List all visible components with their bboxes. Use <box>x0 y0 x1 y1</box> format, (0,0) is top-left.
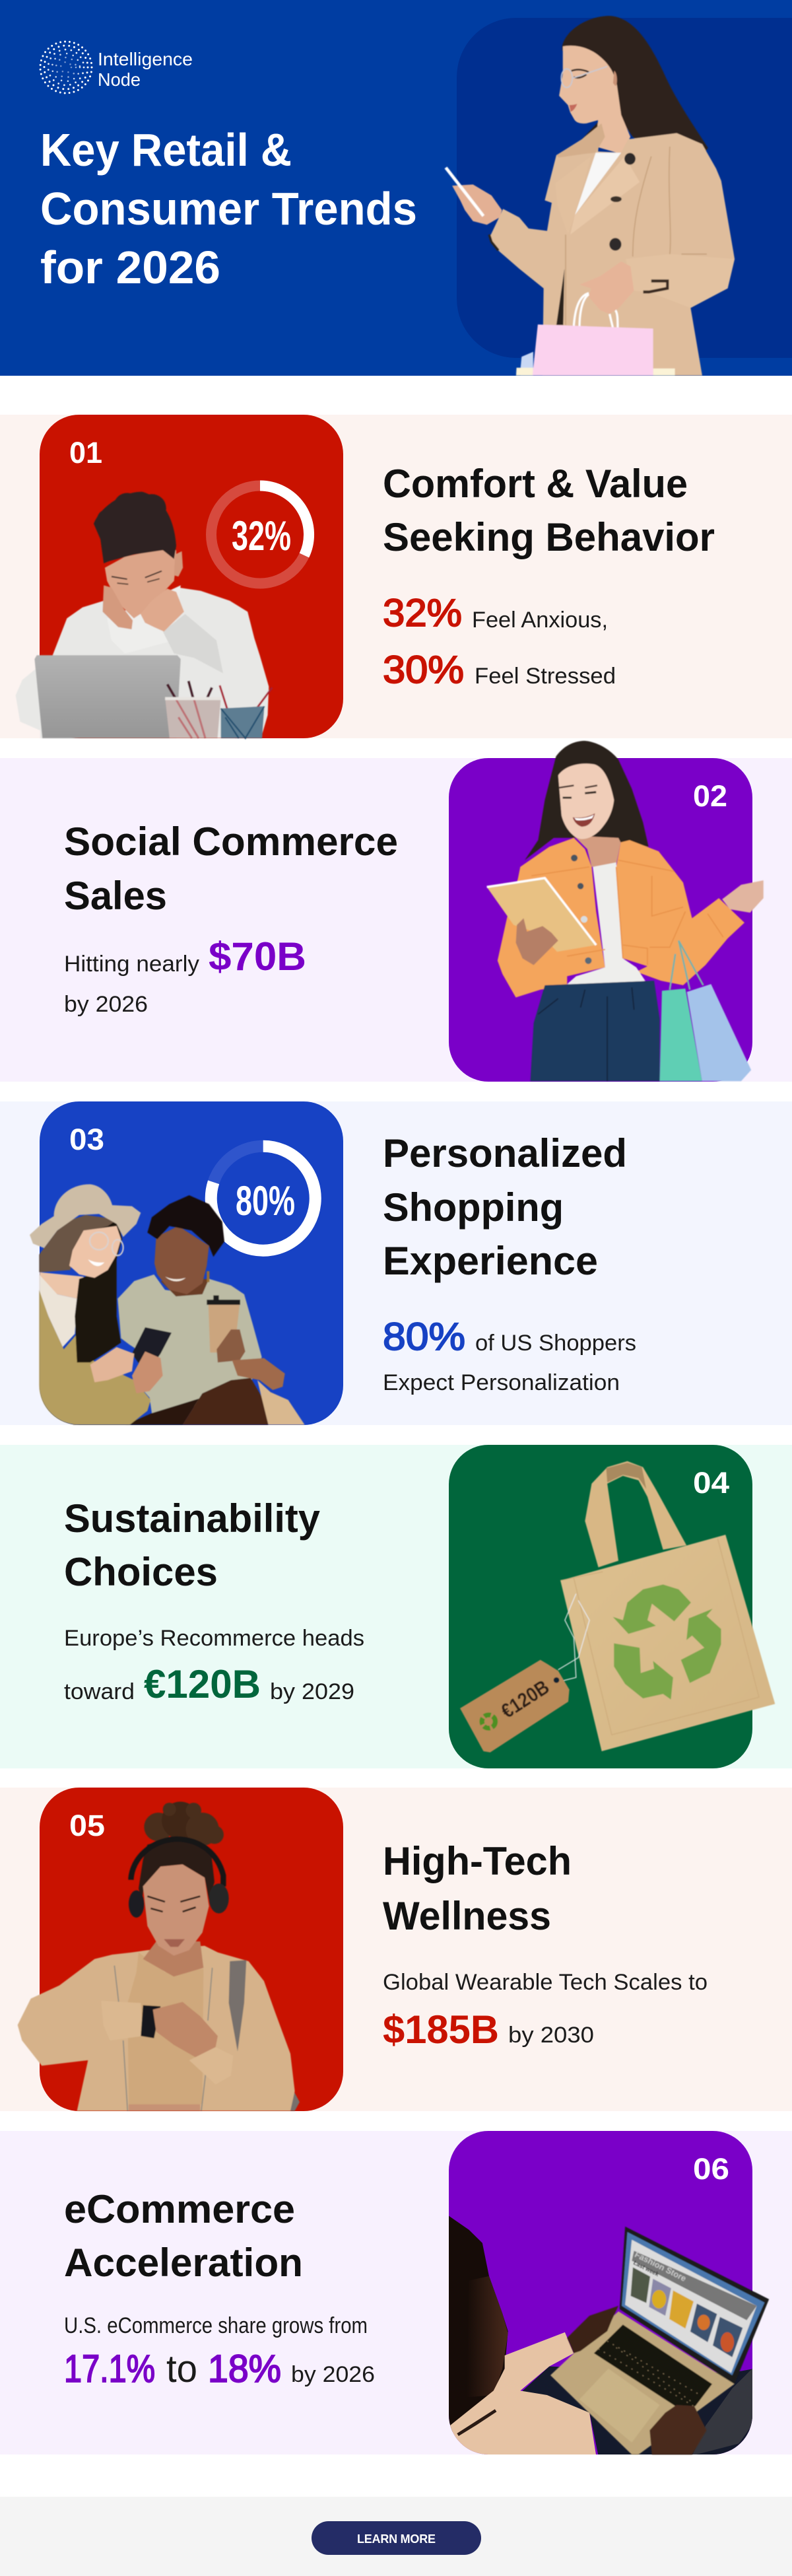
stat: Europe's recommerce heads toward €120B by 2029: by 2029 <box>270 1679 354 1704</box>
stat: Europe's recommerce heads toward €120B by 2029: Europe’s Recommerce heads <box>64 1626 364 1651</box>
card 06 purple <box>449 2131 752 2454</box>
stat: 30% feel stressed <box>383 648 616 691</box>
stat: hitting nearly $70B by 2026: $70B <box>209 934 306 979</box>
panel 03: Personalized Shopping Experience <box>0 1101 792 1425</box>
stat: U.S. eCommerce share grows from 17.1% to 18% by 2026: to <box>166 2348 197 2390</box>
stat: global wearable tech scales to $185B by 2030: by 2030 <box>508 2023 594 2048</box>
photo: stressed man at laptop <box>16 492 272 738</box>
heading <box>64 2187 303 2285</box>
stat: 30% feel stressed: Feel Stressed <box>475 664 616 689</box>
stat: hitting nearly $70B by 2026: Hitting nearly <box>64 952 199 977</box>
heading <box>383 462 715 559</box>
stat: U.S. eCommerce share grows from 17.1% to 18% by 2026: by 2026 <box>291 2362 375 2387</box>
stat: Europe's recommerce heads toward €120B by 2029: €120B <box>144 1662 261 1706</box>
heading <box>383 1839 572 1938</box>
heading: Comfort & Value <box>383 462 688 506</box>
heading <box>64 1496 321 1594</box>
title <box>40 124 417 293</box>
card 03 blue <box>40 1101 343 1425</box>
title: Consumer Trends <box>40 183 417 234</box>
stat: U.S. eCommerce share grows from 17.1% to 18% by 2026: 17.1% <box>64 2348 155 2390</box>
woman in hat and cardigan <box>30 1184 150 1425</box>
stat: Europe's recommerce heads toward €120B by 2029: toward <box>64 1679 135 1704</box>
stat: 80% of US shoppers expect personalization: of US Shoppers <box>475 1331 636 1356</box>
heading: Choices <box>64 1550 218 1594</box>
laptop showing fashion store: Fashion Store <box>633 2249 688 2283</box>
heading: Social Commerce <box>64 819 398 864</box>
number 01: 01 <box>69 436 102 470</box>
donut chart 32% <box>211 486 309 584</box>
donut chart 32%: 32% <box>232 513 291 559</box>
photo: woman in trench coat with phone and shopping bag <box>445 16 735 376</box>
stat: 32% feel anxious: Feel Anxious, <box>472 608 608 633</box>
heading: Acceleration <box>64 2241 303 2285</box>
stat: U.S. eCommerce share grows from 17.1% to 18% by 2026: 18% <box>208 2348 281 2390</box>
card 05 red <box>40 1788 343 2111</box>
panel 04: Sustainability Choices <box>0 1445 792 1768</box>
photo: jute tote bag with recycling symbol and price tag: €120B <box>497 1675 553 1723</box>
header rounded backdrop <box>457 18 792 358</box>
card 04 green <box>449 1445 752 1768</box>
donut chart 80%: 80% <box>236 1178 295 1224</box>
laptop showing fashion store: Last week <box>632 2259 660 2278</box>
photo: man browsing a fashion store on a laptop <box>447 2214 769 2456</box>
card 02 purple <box>449 758 752 1082</box>
logo: Intelligence Node <box>40 42 193 93</box>
heading: Shopping <box>383 1185 564 1230</box>
stat: global wearable tech scales to $185B by 2030: Global Wearable Tech Scales to <box>383 1970 708 1995</box>
laptop showing fashion store <box>550 2227 769 2454</box>
number 04: 04 <box>693 1466 729 1500</box>
heading: Sales <box>64 874 167 918</box>
stat: hitting nearly $70B by 2026: by 2026 <box>64 992 148 1017</box>
stat: 32% feel anxious: 32% <box>383 592 462 635</box>
heading: Sustainability <box>64 1496 321 1541</box>
stat: global wearable tech scales to $185B by 2030 <box>383 1970 708 2052</box>
number 06: 06 <box>693 2152 729 2186</box>
stat: 30% feel stressed: 30% <box>383 648 464 691</box>
heading <box>64 819 398 918</box>
panel 02: Social Commerce Sales <box>0 741 792 1082</box>
header banner <box>0 0 792 376</box>
card 01 red <box>40 415 343 738</box>
number 03: 03 <box>69 1123 104 1156</box>
stat: 80% of US shoppers expect personalization: Expect Personalization <box>383 1370 620 1395</box>
panel 05: High-Tech Wellness <box>0 1788 792 2111</box>
stat: hitting nearly $70B by 2026 <box>64 934 306 1017</box>
stat: Europe's recommerce heads toward €120B by 2029 <box>64 1626 364 1706</box>
stat: global wearable tech scales to $185B by 2030: $185B <box>383 2007 499 2052</box>
number 02: 02 <box>693 779 727 813</box>
stat: 80% of US shoppers expect personalization: 80% <box>383 1315 465 1358</box>
panel 01: Comfort & Value Seeking Behavior <box>0 415 792 738</box>
heading: Wellness <box>383 1894 551 1938</box>
title: Key Retail & <box>40 124 292 176</box>
photo: two women sharing a phone <box>30 1184 305 1425</box>
number 05: 05 <box>69 1809 105 1842</box>
footer band <box>0 2497 792 2576</box>
button: learn more: LEARN MORE <box>357 2532 436 2546</box>
photo: woman with tablet and shopping bags <box>487 741 764 1081</box>
button: learn more <box>312 2521 481 2555</box>
stat: U.S. eCommerce share grows from 17.1% to 18% by 2026 <box>64 2313 375 2390</box>
heading: Experience <box>383 1239 598 1283</box>
donut chart 80% <box>211 1146 315 1251</box>
stat: 80% of US shoppers expect personalization <box>383 1315 636 1395</box>
heading: Personalized <box>383 1131 627 1175</box>
photo: woman with headphones checking smartwatch <box>18 1801 300 2111</box>
logo: Intelligence Node: Node <box>98 69 141 90</box>
stat: U.S. eCommerce share grows from 17.1% to 18% by 2026: U.S. eCommerce share grows from <box>64 2313 368 2338</box>
heading: Seeking Behavior <box>383 515 715 559</box>
photo: jute tote bag with recycling symbol and price tag <box>460 1461 775 1753</box>
heading: High-Tech <box>383 1839 572 1883</box>
heading: eCommerce <box>64 2187 295 2231</box>
panel 06: eCommerce Acceleration <box>0 2131 792 2456</box>
logo: Intelligence Node: Intelligence <box>98 49 193 69</box>
heading <box>383 1131 627 1283</box>
stat: 32% feel anxious <box>383 592 608 635</box>
title: for 2026 <box>40 242 220 293</box>
